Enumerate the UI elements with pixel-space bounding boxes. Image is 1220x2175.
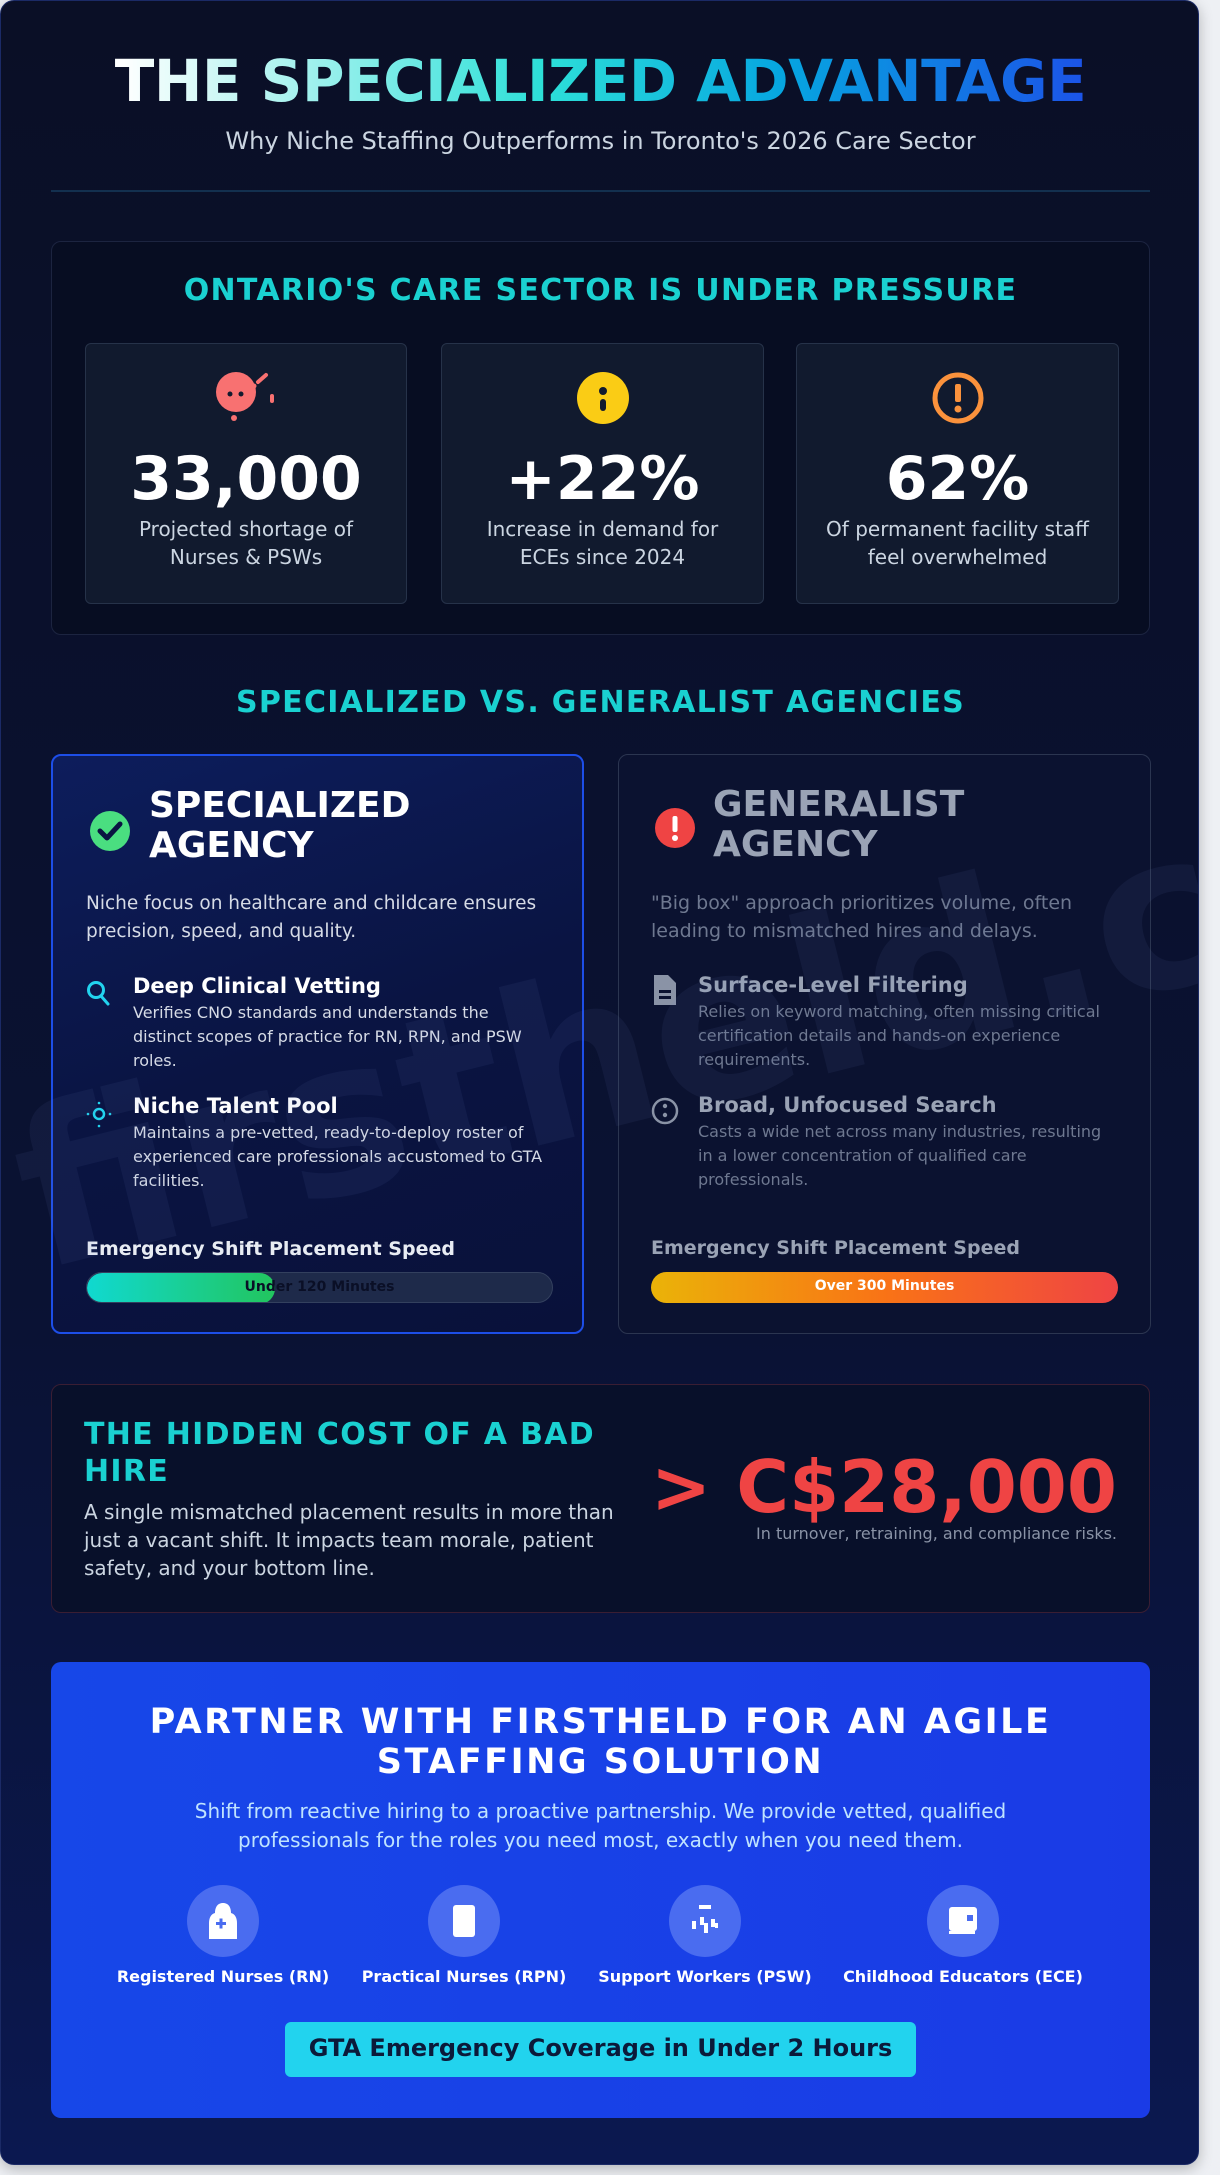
subtitle: Why Niche Staffing Outperforms in Toronto's 2026 Care Sector <box>225 127 976 155</box>
panel: specialized agency <box>51 754 584 1334</box>
stat card: shortage <box>85 343 407 604</box>
stat card: ECE demand <box>441 343 764 604</box>
role: ECE <box>843 1885 1083 1986</box>
panel: CTA: Support Workers (PSW) <box>598 1967 812 1986</box>
panel: pressure stats <box>51 241 1150 635</box>
text: intro: Niche focus on healthcare and childcare ensures precision, speed, and quality. <box>86 893 536 942</box>
icon: red alert <box>655 808 695 848</box>
icon: orange alert <box>932 372 984 424</box>
stat card: overwhelmed <box>796 343 1119 604</box>
feature: talent pool: Maintains a pre-vetted, ready-to-deploy roster of experienced care professionals accustomed to GTA facilities. <box>133 1123 542 1190</box>
heading: pressure: ONTARIO'S CARE SECTOR IS UNDER PRESSURE <box>184 273 1017 308</box>
stat card: overwhelmed: 62% <box>886 444 1029 514</box>
feature: clinical vetting: Verifies CNO standards and understands the distinct scopes of practice for RN, RPN, and PSW roles. <box>133 1003 522 1070</box>
stat card: overwhelmed: Of permanent facility staff <box>826 517 1089 541</box>
stat: C$28,000: > C$28,000 <box>651 1445 1117 1529</box>
icon: green check <box>90 811 130 851</box>
role: RPN <box>362 1885 566 1986</box>
text: cost explanation: A single mismatched placement results in more than just a vacant shift. It impacts team morale, patient safety, and your bottom line. <box>84 1500 614 1580</box>
stat card: shortage: 33,000 <box>130 444 362 514</box>
heading: CTA: PARTNER WITH FIRSTHELD FOR AN AGILE STAFFING SOLUTION <box>150 1702 1051 1782</box>
role: RN <box>117 1885 329 1986</box>
feature: surface filtering <box>654 973 1100 1069</box>
stat card: overwhelmed: feel overwhelmed <box>868 545 1047 569</box>
text: intro: "Big box" approach prioritizes volume, often leading to mismatched hires and delays. <box>651 892 1072 942</box>
title: generalist <box>713 784 964 865</box>
panel: CTA <box>51 1662 1150 2118</box>
stat card: ECE demand: ECEs since 2024 <box>520 545 685 569</box>
panel: CTA: Practical Nurses (RPN) <box>362 1967 566 1986</box>
label: speed: Emergency Shift Placement Speed <box>651 1237 1020 1259</box>
title: generalist: AGENCY <box>713 824 878 865</box>
caption: cost: In turnover, retraining, and compliance risks. <box>756 1524 1117 1543</box>
title: THE SPECIALIZED ADVANTAGE <box>115 47 1086 115</box>
bar: over 300 minutes: Over 300 Minutes <box>815 1278 954 1294</box>
title: specialized: SPECIALIZED <box>149 785 410 826</box>
feature: talent pool <box>86 1094 542 1190</box>
panel: CTA: Registered Nurses (RN) <box>117 1967 329 1986</box>
title: specialized: AGENCY <box>149 825 314 866</box>
heading: comparison: SPECIALIZED VS. GENERALIST AGENCIES <box>236 685 965 720</box>
feature: broad search <box>652 1093 1101 1189</box>
panel: hidden cost <box>51 1384 1150 1613</box>
icon: sad face <box>216 372 274 421</box>
bar: under 120 minutes: Under 120 Minutes <box>245 1279 394 1295</box>
button: emergency coverage <box>285 2022 916 2077</box>
title: generalist: GENERALIST <box>713 784 964 825</box>
bar: under 120 minutes <box>86 1272 553 1303</box>
feature: broad search: Broad, Unfocused Search <box>698 1093 997 1117</box>
feature: talent pool: Niche Talent Pool <box>133 1094 338 1118</box>
panel: generalist agency <box>618 754 1151 1334</box>
text: CTA: Shift from reactive hiring to a proactive partnership. We provide vetted, qualified professionals for the roles you need most, exactly when you need them. <box>195 1799 1006 1852</box>
stat card: ECE demand: Increase in demand for <box>487 517 718 541</box>
feature: surface filtering: Relies on keyword matching, often missing critical certification details and hands-on experience requirements. <box>698 1002 1100 1069</box>
stat card: shortage: Projected shortage of <box>139 517 353 541</box>
heading: hidden cost: THE HIDDEN COST OF A BAD HIRE <box>84 1417 595 1489</box>
button: emergency coverage: GTA Emergency Coverage in Under 2 Hours <box>309 2034 892 2062</box>
feature: clinical vetting: Deep Clinical Vetting <box>133 974 381 998</box>
panel: CTA: Childhood Educators (ECE) <box>843 1967 1083 1986</box>
stat card: shortage: Nurses & PSWs <box>170 545 322 569</box>
stat card: ECE demand: +22% <box>506 444 699 514</box>
role: PSW <box>598 1885 812 1986</box>
title: specialized <box>149 785 410 866</box>
feature: surface filtering: Surface-Level Filtering <box>698 973 968 997</box>
icon: yellow info <box>577 372 629 424</box>
label: speed: Emergency Shift Placement Speed <box>86 1238 455 1260</box>
feature: broad search: Casts a wide net across many industries, resulting in a lower concentration of qualified care professionals. <box>698 1122 1101 1189</box>
feature: clinical vetting <box>87 974 522 1070</box>
bar: over 300 minutes <box>651 1272 1118 1303</box>
